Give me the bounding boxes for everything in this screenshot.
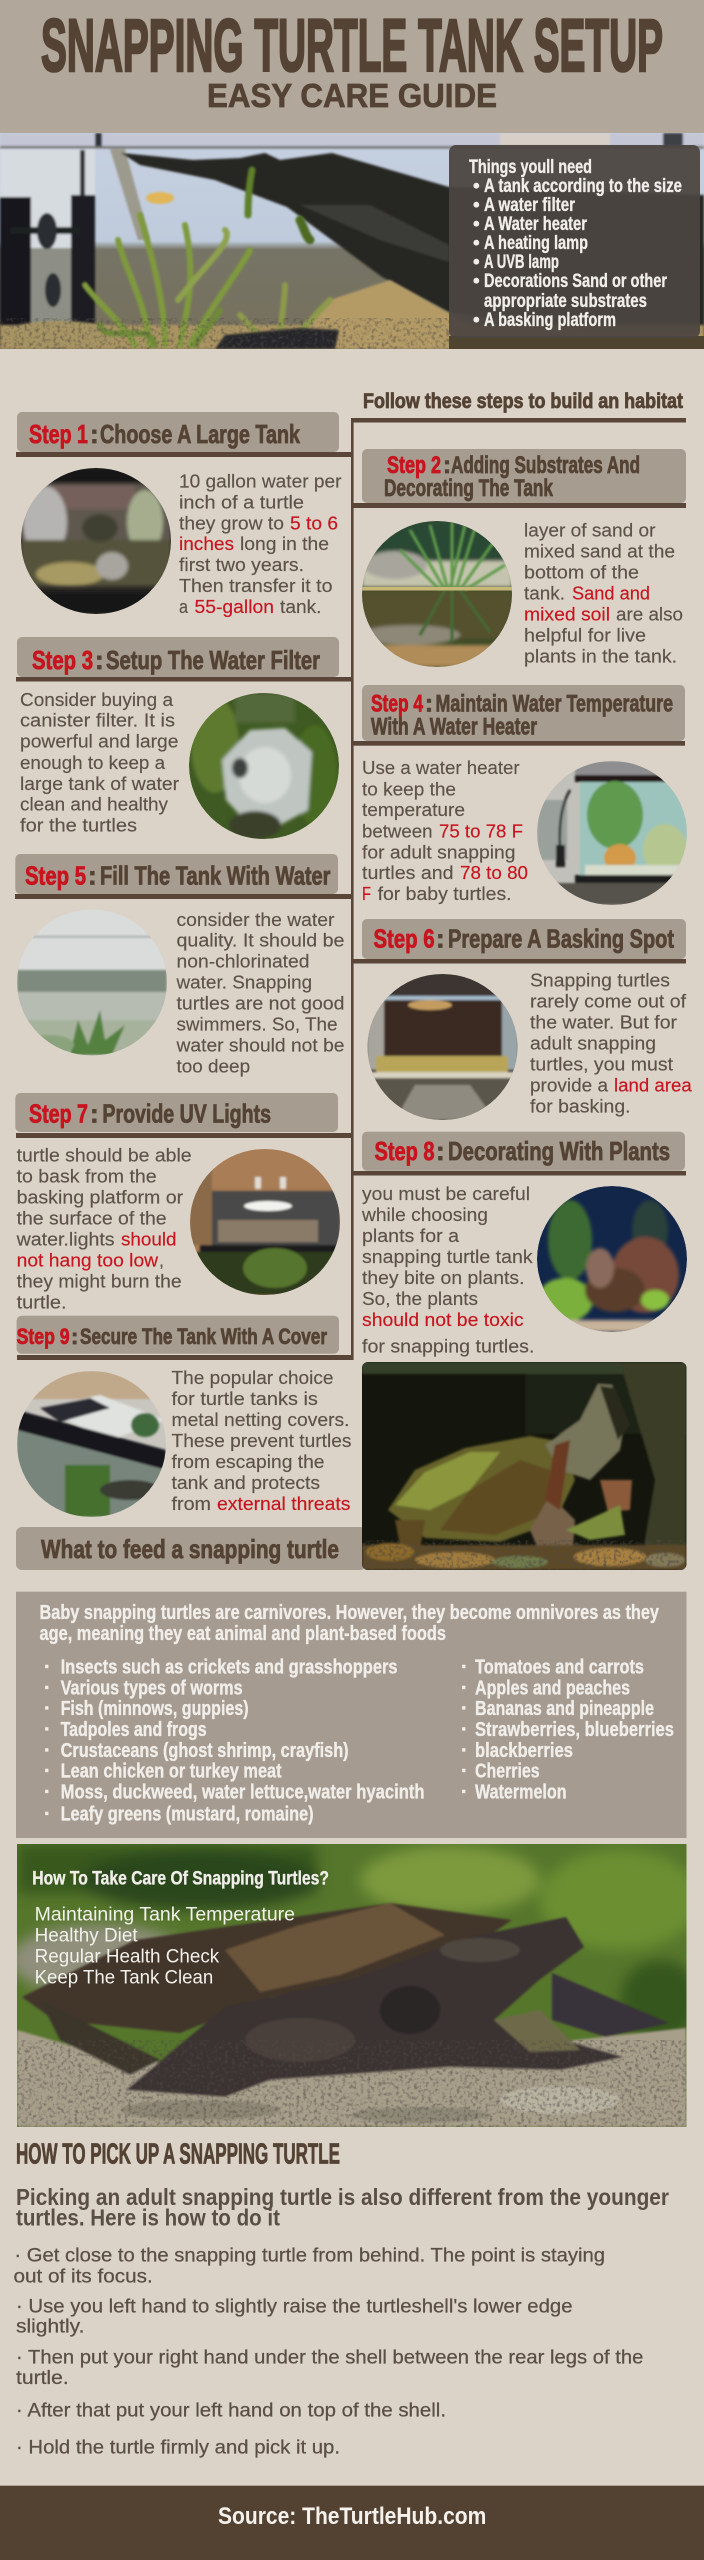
hero gravel and stones [0,192,704,349]
section intro: turtles. Here is how to do it [16,2205,280,2231]
care checklist: Keep The Tank Clean [35,1967,213,1988]
step 1 text: tank. [280,597,322,617]
fruit and vegetable list: Cherries [475,1761,540,1783]
step 9 text [172,1368,352,1514]
panel: things you'll need: appropriate substrates [484,291,647,312]
care checklist [32,1868,329,1988]
step 7 heading: : [90,1098,99,1128]
photo: snapping turtles on rock [10,1844,700,2127]
step 8 heading: Step 8 [374,1136,434,1166]
step 4 text: between [362,821,432,841]
step 8 text: they bite on plants. [362,1268,524,1288]
photo: step 5 filling water [17,910,167,1056]
step 5 heading: : [88,860,97,890]
step 3 text: Consider buying a [20,690,174,710]
step 3 text: clean and healthy [20,795,168,815]
step 8 heading: : [436,1136,445,1166]
step 4 heading: Step 4 [371,691,423,718]
animal foods list: Fish (minnows, guppies) [61,1698,249,1720]
step 4 heading [351,685,685,746]
step 1 text: 5 to 6 [290,513,338,533]
step 5 heading: Step 5 [25,860,86,890]
section intro [16,2184,669,2231]
step 3 heading: : [95,645,104,675]
step 5 text: water. Snapping [175,973,312,993]
step 3 text [20,690,179,836]
step 9 text: These prevent turtles [172,1431,352,1451]
pick-up instructions: · Get close to the snapping turtle from behind. The point is staying [14,2245,605,2267]
panel: things you'll need [449,145,700,338]
step 7 text: they might burn the [17,1272,182,1292]
step 8 text: snapping turtle tank [362,1247,534,1267]
pick-up instructions [14,2245,643,2458]
heading: what to feed [16,1527,366,1570]
step 7 text [16,1146,192,1312]
step 2 text: bottom of the [524,563,639,583]
step 8 text: plants for a [362,1226,460,1246]
step 9 heading [17,1316,353,1360]
footer [0,2486,704,2560]
panel: things you'll need: A basking platform [484,310,616,331]
step 8 heading [351,1132,686,1176]
animal foods list: · [44,1804,51,1826]
step 7 text: turtle should be able [17,1146,192,1166]
step 8 text: for snapping turtles. [362,1336,534,1356]
fruit and vegetable list: · [461,1782,468,1804]
photo: step 4 heater and aquarium [537,761,687,905]
step 2 text: helpful for live [524,626,646,646]
animal foods list: · [44,1656,51,1678]
fruit and vegetable list [461,1656,674,1804]
fruit and vegetable list: · [461,1761,468,1783]
step 6 heading: : [436,924,445,954]
step 5 text: water should not be [175,1035,344,1055]
step 2 text: layer of sand or [524,521,656,541]
step 8 text: should not be toxic [362,1310,524,1330]
care checklist: Regular Health Check [35,1946,220,1967]
column divider [351,418,686,1360]
animal foods list: Leafy greens (mustard, romaine) [61,1804,314,1826]
step 9 heading: Step 9 [17,1324,70,1349]
fruit and vegetable list: · [461,1698,468,1720]
step 6 text [530,971,693,1117]
step 2 text [524,521,683,667]
fruit and vegetable list: Apples and peaches [475,1677,630,1699]
step 6 text: for basking. [530,1097,631,1117]
step 9 text: from escaping the [172,1452,324,1472]
panel: things you'll need: A water filter [484,195,575,216]
step 5 text: quality. It should be [176,931,344,951]
step 1 heading: : [90,419,99,449]
care checklist: Maintaining Tank Temperature [35,1905,295,1926]
step 4 text: temperature [362,800,465,820]
animal foods list: · [44,1698,51,1720]
step 2 heading [351,449,686,508]
animal foods list: · [44,1677,51,1699]
step 4 text: 75 to 78 F [439,821,523,841]
panel: things you'll need: • [473,214,480,235]
animal foods list: Lean chicken or turkey meat [61,1761,282,1783]
panel: things you'll need: A heating lamp [484,233,588,254]
step 7 heading [15,1093,351,1138]
step 7 text: to bask from the [17,1167,157,1187]
photo: step 3 water filter [189,693,339,839]
panel: things you'll need: • [473,252,480,273]
panel: what to feed [16,1592,686,1838]
step 4 text [362,758,528,904]
step 1 text: inches [179,534,234,554]
panel: things you'll need: A Water heater [484,214,587,235]
step 9 text: from [172,1494,211,1514]
panel: things you'll need: • [473,176,480,197]
animal foods list: Crustaceans (ghost shrimp, crayfish) [61,1740,349,1762]
step 3 text: powerful and large [20,732,178,752]
step 2 text: are also [616,605,683,625]
step 4 text: to keep the [362,779,456,799]
step 7 heading: Provide UV Lights [102,1098,271,1128]
step 2 heading: Decorating The Tank [384,475,553,502]
step 6 heading: Step 6 [374,924,434,954]
step 7 text: , [159,1251,164,1271]
step 4 heading: : [425,691,433,718]
step 1 text [179,471,342,617]
step 8 text: So, the plants [362,1289,478,1309]
section heading: HOW TO PICK UP A SNAPPING TURTLE [16,2138,340,2170]
step 9 text: external threats [217,1494,350,1514]
step 7 text: turtle. [17,1292,67,1312]
step 1 text: long in the [240,534,329,554]
fruit and vegetable list: blackberries [475,1740,573,1762]
step 2 text: plants in the tank. [524,647,677,667]
step 2 text: Sand and [572,584,650,604]
step 3 text: for the turtles [20,816,137,836]
step 1 text: a [179,597,189,617]
step 5 text: non-chlorinated [176,951,310,971]
step 4 text: for adult snapping [362,842,516,862]
pick-up instructions: slightly. [16,2316,84,2338]
hero plants [85,170,330,345]
panel: things you'll need: • [473,310,480,331]
care checklist: Healthy Diet [35,1926,138,1947]
step 5 text [175,910,344,1076]
step 1 text: they grow to [179,513,284,533]
step 3 text: large tank of water [20,774,179,794]
animal foods list: Moss, duckweed, water lettuce,water hyacinth [61,1782,425,1804]
step 6 text: rarely come out of [530,992,687,1012]
pick-up instructions: · After that put your left hand on top of the shell. [16,2400,446,2422]
step 2 heading: Step 2 [387,452,441,479]
step 7 text: the surface of the [17,1209,167,1229]
subtitle: EASY CARE GUIDE [207,77,497,114]
step 1 heading [16,412,351,457]
pick-up instructions: turtle. [16,2367,69,2389]
step 9 text: for turtle tanks is [172,1389,318,1409]
source: Source: TheTurtleHub.com [218,2503,486,2530]
step 4 heading: With A Water Heater [371,713,537,740]
step 7 text: basking platform or [17,1188,183,1208]
step 3 text: enough to keep a [20,753,166,773]
step 4 text: F [362,884,371,904]
step 7 heading: Step 7 [29,1098,88,1128]
pick-up instructions: · Hold the turtle firmly and pick it up. [16,2436,340,2458]
step 6 text: turtles, you must [530,1055,673,1075]
care checklist: How To Take Care Of Snapping Turtles? [32,1868,329,1889]
pick-up instructions: out of its focus. [14,2265,153,2287]
photo: step 2 planted water [360,521,512,667]
step 6 text: adult snapping [530,1034,656,1054]
step 3 heading: Step 3 [32,645,93,675]
step 4 text: turtles and [362,863,454,883]
feed intro text [40,1602,660,1645]
photo: step 8 aquarium plants [537,1186,687,1332]
step 7 text: water.lights [16,1230,115,1250]
step 1 text: first two years. [179,555,304,575]
photo: step 9 tank cover [17,1371,166,1517]
step 6 text: land area [614,1076,693,1096]
step 1 text: 55-gallon [194,597,274,617]
panel: things you'll need: Things youll need [469,157,592,178]
hero photo: aquarium with driftwood [0,133,704,349]
animal foods list: · [44,1740,51,1762]
step 7 text: not hang too low [17,1251,159,1271]
step 1 text: inch of a turtle [179,492,304,512]
step 6 heading [351,919,686,964]
step 8 text [361,1184,534,1356]
step 9 heading: : [71,1324,78,1349]
panel: things you'll need: • [473,233,480,254]
photo: snapping turtle in tank [362,1362,687,1570]
step 2 text: mixed sand at the [524,542,675,562]
animal foods list: · [44,1782,51,1804]
step 1 text: Then transfer it to [179,576,332,596]
fruit and vegetable list: · [461,1677,468,1699]
fruit and vegetable list: · [461,1719,468,1741]
step 6 text: provide a [530,1076,609,1096]
step 4 text: Use a water heater [362,758,520,778]
step 1 heading: Choose A Large Tank [100,419,300,449]
section: how to pick up a snapping turtle [14,2138,669,2458]
heading: what to feed: What to feed a snapping turtle [41,1534,339,1564]
step 9 heading: Secure The Tank With A Cover [80,1324,327,1349]
step 8 text: you must be careful [362,1184,530,1204]
animal foods list: · [44,1719,51,1741]
pick-up instructions: · Then put your right hand under the shell between the rear legs of the [16,2346,643,2368]
step 5 text: swimmers. So, The [176,1014,338,1034]
step 5 text: consider the water [176,910,335,930]
panel: things you'll need: • [473,195,480,216]
animal foods list: Tadpoles and frogs [61,1719,207,1741]
fruit and vegetable list: · [461,1656,468,1678]
step 9 text: tank and protects [172,1473,320,1493]
step 9 text: metal netting covers. [172,1410,350,1430]
step 6 text: the water. But for [530,1013,677,1033]
header band [0,0,704,133]
step 5 heading: Fill The Tank With Water [100,860,330,890]
fruit and vegetable list: · [461,1740,468,1762]
step 7 text: should [121,1230,176,1250]
step 4 text: 78 to 80 [460,863,528,883]
step 5 heading [15,854,351,899]
animal foods list: Insects such as crickets and grasshoppers [61,1656,398,1678]
step 8 text: while choosing [361,1205,488,1225]
animal foods list: · [44,1761,51,1783]
step 2 text: mixed soil [524,605,610,625]
step 5 text: too deep [176,1056,250,1076]
step 2 text: tank. [524,584,565,604]
step 4 text: for baby turtles. [378,884,512,904]
photo: step 6 basking spot [367,974,518,1120]
feed intro text: age, meaning they eat animal and plant-based foods [40,1623,446,1645]
fruit and vegetable list: Watermelon [475,1782,567,1804]
step 9 text: The popular choice [172,1368,334,1388]
step 1 heading: Step 1 [29,419,88,449]
animal foods list: Various types of worms [61,1677,243,1699]
step 2 heading: : [443,452,451,479]
panel: things you'll need: • [473,271,480,292]
step 3 text: canister filter. It is [20,711,175,731]
step 3 heading: Setup The Water Filter [106,645,320,675]
step 6 text: Snapping turtles [530,971,670,991]
pick-up instructions: · Use you left hand to slightly raise the turtleshell's lower edge [16,2295,572,2317]
photo: step 7 uv light [190,1149,340,1295]
panel: things you'll need: A UVB lamp [484,252,559,273]
fruit and vegetable list: Tomatoes and carrots [475,1656,644,1678]
step 3 heading [16,637,351,682]
animal foods list [44,1656,425,1826]
fruit and vegetable list: Bananas and pineapple [475,1698,654,1720]
step 1 text: 10 gallon water per [179,471,342,491]
photo: step 1 terrarium [21,468,171,614]
step 5 text: turtles are not good [176,994,344,1014]
